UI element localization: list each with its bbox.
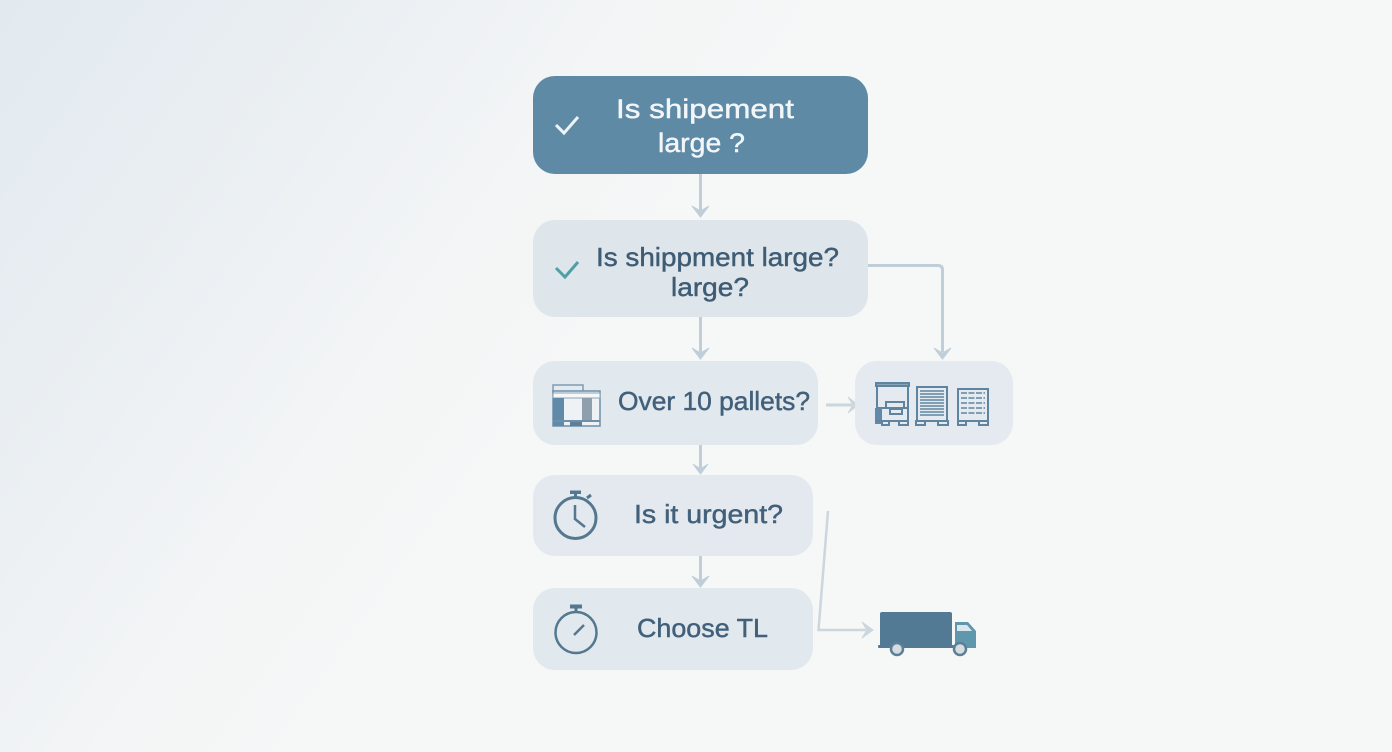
icon: stacked pallet: [915, 387, 949, 425]
panel: over 10 pallets question: [533, 361, 818, 445]
panel: choose TL: [533, 588, 813, 670]
connector: second box to pallets box: [868, 266, 951, 359]
icon: stopwatch with clock hands: [555, 490, 596, 538]
connector: second box to pallet question: [692, 317, 709, 359]
heading: first question text: large ?: [658, 128, 745, 158]
connector: top box to second box: [692, 174, 709, 217]
connector: urgency question to choose TL: [692, 556, 709, 587]
panel: urgency question: [533, 475, 813, 556]
text: is it urgent: Is it urgent?: [634, 499, 783, 529]
icon: teal check: [556, 262, 578, 277]
connector: pallet question to urgency question: [693, 445, 708, 474]
icon: loaded pallet: [875, 383, 909, 425]
text: second question: Is shippment large?: [596, 242, 839, 272]
panel: second question: [533, 220, 868, 317]
connector: pallet question to pallet icons: [826, 397, 858, 413]
connector: urgency question to truck: [818, 511, 873, 638]
icon: warehouse: [553, 385, 600, 426]
icon: crate pallet: [957, 389, 989, 425]
heading: first question text: Is shipement: [616, 94, 795, 124]
text: over 10 pallets: Over 10 pallets?: [618, 386, 810, 416]
panel: first question (dark): [533, 76, 868, 174]
icon: stopwatch: [556, 604, 596, 653]
icon: truck: [878, 612, 976, 655]
text: second question: large?: [671, 272, 749, 302]
text: choose TL: Choose TL: [637, 613, 768, 643]
icon: white check: [556, 117, 578, 133]
panel: pallet icons: [855, 361, 1013, 445]
